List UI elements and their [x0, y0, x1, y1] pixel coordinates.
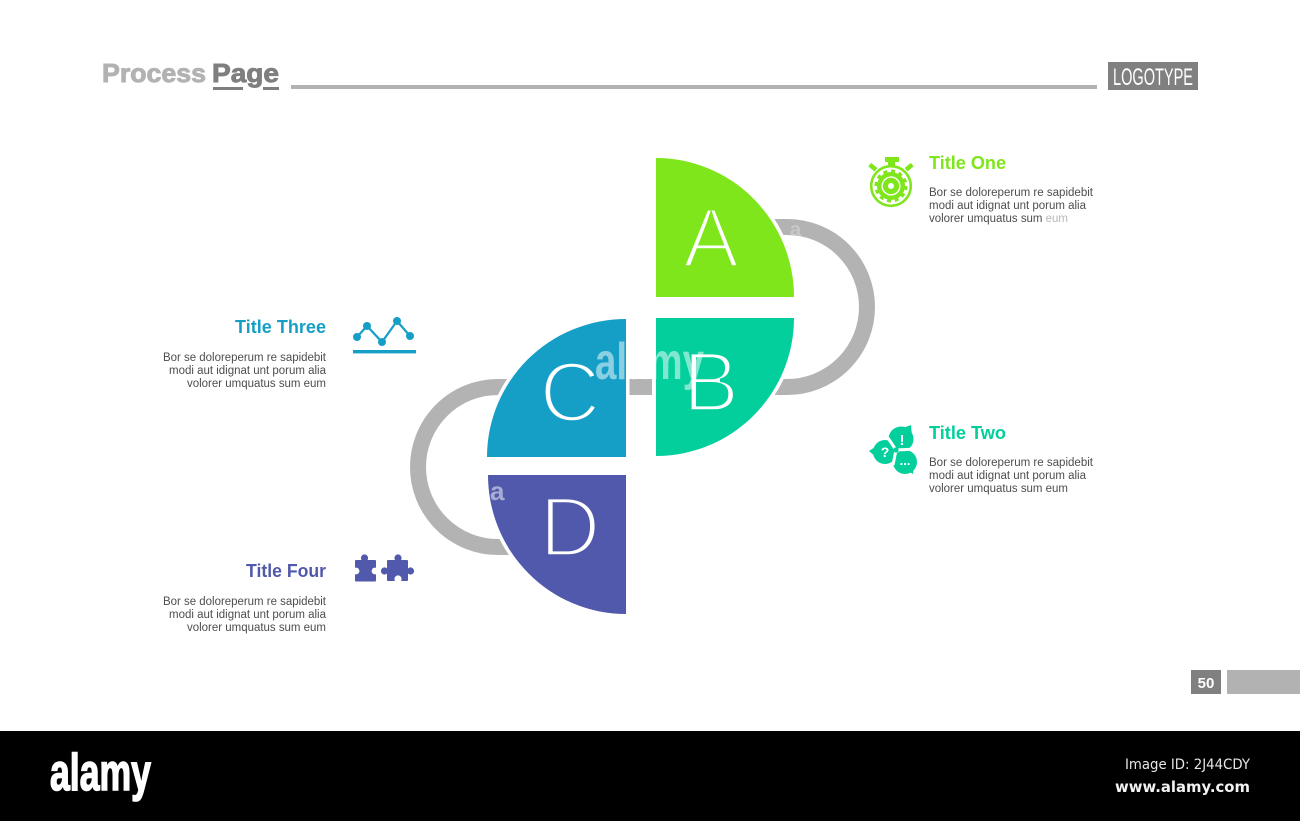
icon: speech bubbles: ... — [900, 453, 910, 468]
header: title: Process — [102, 58, 206, 88]
segment C: C — [540, 345, 600, 439]
text block: title four: Bor se doloreperum re sapidebit — [163, 596, 327, 608]
icon: speech bubbles — [869, 425, 917, 474]
watermark — [490, 219, 802, 506]
text block: title two: volorer umquatus sum eum — [929, 483, 1068, 495]
text block: title three: Title Three — [235, 317, 326, 337]
segment D: D — [540, 480, 600, 574]
segment B — [656, 318, 794, 456]
watermark: a — [790, 219, 802, 241]
text block: title two — [929, 423, 1094, 495]
page number: 50 — [1198, 675, 1214, 692]
segment A: A — [683, 191, 739, 285]
text block: title one: volorer umquatus sum eum — [929, 213, 1068, 225]
logotype badge — [1108, 62, 1198, 91]
text block: title four — [163, 561, 327, 634]
text block: title three: volorer umquatus sum eum — [187, 378, 326, 390]
text block: title two: modi aut idignat unt porum alia — [929, 470, 1087, 482]
text block: title one: Title One — [929, 153, 1006, 173]
footer band — [0, 731, 1300, 821]
text block: title three: modi aut idignat unt porum alia — [169, 365, 327, 377]
icon: speech bubbles: ! — [900, 432, 904, 449]
segment A — [656, 158, 794, 297]
header rule — [291, 85, 1097, 89]
text block: title one: modi aut idignat unt porum alia — [929, 200, 1087, 212]
text block: title four: volorer umquatus sum eum — [187, 622, 326, 634]
footer band: www.alamy.com — [1115, 778, 1250, 796]
text block: title three: Bor se doloreperum re sapidebit — [163, 352, 327, 364]
segment B: B — [683, 335, 739, 429]
text block: title four: Title Four — [246, 561, 326, 581]
icon: line chart — [353, 317, 416, 353]
text block: title two: Bor se doloreperum re sapidebit — [929, 457, 1094, 469]
connector: right arc — [765, 227, 867, 387]
segment D — [488, 475, 626, 614]
text block: title three — [163, 317, 327, 390]
icon: stopwatch — [868, 157, 914, 206]
text block: title two: Title Two — [929, 423, 1006, 443]
footer band: Image ID: 2J44CDY — [1125, 757, 1250, 773]
icon: puzzle pieces — [353, 554, 414, 583]
logotype badge: LOGOTYPE — [1113, 64, 1193, 91]
segment C — [487, 319, 626, 457]
header: title — [102, 58, 279, 90]
text block: title one: Bor se doloreperum re sapidebit — [929, 187, 1094, 199]
text block: title one — [929, 153, 1094, 225]
header: title: Page — [212, 58, 279, 88]
icon: speech bubbles: ? — [881, 444, 889, 460]
footer band: alamy — [50, 744, 151, 802]
text block: title four: modi aut idignat unt porum alia — [169, 609, 327, 621]
connector: centre dash — [629, 379, 652, 395]
watermark: a — [490, 476, 505, 506]
connector: left arc — [418, 387, 520, 547]
watermark: alamy — [595, 333, 704, 391]
page number — [1191, 670, 1300, 694]
